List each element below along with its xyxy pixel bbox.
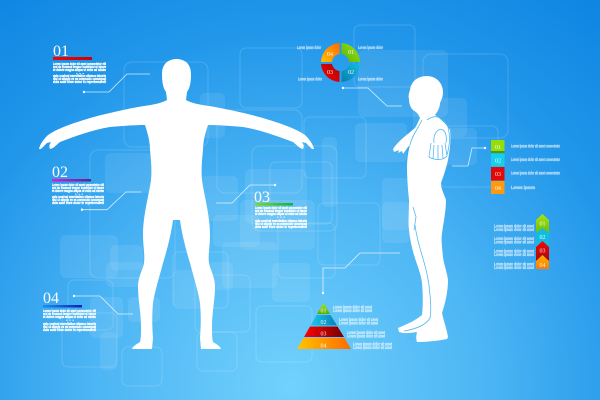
pyramid chart — [297, 303, 392, 350]
callout 04 — [43, 290, 133, 332]
item 04: 04 — [495, 186, 501, 192]
connector 03 — [216, 184, 276, 203]
number 02: 02 — [52, 164, 68, 181]
callout 01 — [53, 43, 150, 93]
bar 04 — [43, 305, 82, 308]
text block 04: duis aute irure dolor in reprehenderit — [43, 328, 97, 332]
text block 02: sed do eiusmod tempor incididunt ut labore — [52, 186, 104, 190]
pyramid chart: Lorem ipsum dolor sit amet — [333, 308, 372, 313]
item 01: 01 — [495, 145, 501, 151]
arrow 03: 03 — [540, 248, 546, 254]
text block 04 — [43, 309, 97, 332]
tier 03: 03 — [320, 332, 326, 338]
arrow stack: Lorem ipsum dolor sit amet — [494, 240, 534, 244]
text block 03: et dolore magna aliqua ut enim ad minim — [255, 212, 307, 216]
text block 02: . . . — [75, 192, 83, 196]
tier 02: 02 — [320, 320, 326, 326]
connector 04 — [73, 295, 133, 314]
donut labels: Lorem ipsum dolor — [358, 76, 383, 82]
text block 04: quis nostrud exercitation ullamco laboris — [43, 322, 96, 326]
text block 01: nisi ut aliquip ex ea commodo consequat — [53, 77, 107, 81]
donut chart: 01 — [348, 50, 354, 56]
text block 02: quis nostrud exercitation ullamco laboris — [52, 195, 104, 199]
arrow stack: Lorem ipsum dolor sit amet — [494, 252, 534, 257]
text block 04: et dolore magna aliqua ut enim ad minim — [43, 315, 96, 319]
callout 03 — [216, 184, 308, 229]
tier 01: 01 — [320, 308, 326, 314]
text block 02: duis aute irure dolor in reprehenderit — [52, 201, 105, 205]
text block 03 — [255, 206, 308, 229]
arrow 04: 04 — [540, 263, 546, 269]
text block 02: Lorem ipsum dolor sit amet consectetur elit — [52, 183, 105, 187]
numbered list: Lorem ipsum dolor sit amet consectetur — [511, 157, 560, 162]
connector: pyramid — [322, 253, 400, 294]
segment 02 — [342, 64, 360, 82]
connector: donut — [342, 87, 402, 106]
text block 03: nisi ut aliquip ex ea commodo consequat — [255, 222, 308, 226]
segment 03 — [321, 64, 340, 82]
pyramid chart: Lorem ipsum dolor sit amet — [339, 317, 378, 322]
pyramid chart: Lorem ipsum dolor sit amet — [333, 304, 372, 310]
pyramid chart: Lorem ipsum dolor sit amet — [339, 320, 378, 326]
segment 01 — [342, 43, 360, 62]
text block 01 — [53, 62, 107, 84]
donut labels: Lorem ipsum dolor — [297, 45, 321, 50]
pyramid chart: Lorem ipsum dolor sit amet — [347, 334, 385, 338]
text block 01: quis nostrud exercitation ullamco laboris — [53, 74, 106, 78]
callout 02 — [52, 164, 141, 211]
bar 03 — [255, 203, 293, 206]
donut chart: 03 — [327, 70, 333, 76]
figure: side view silhouette — [393, 76, 450, 342]
numbered list: Lorem ipsum — [511, 185, 535, 190]
donut labels: Lorem ipsum dolor — [358, 45, 383, 50]
text block 01: duis aute irure dolor in reprehenderit — [53, 80, 107, 84]
text block 03: duis aute irure dolor in reprehenderit — [255, 225, 308, 229]
pyramid chart: Lorem ipsum dolor sit amet — [353, 342, 392, 346]
donut chart — [321, 43, 360, 82]
arrow stack: Lorem ipsum dolor sit amet — [494, 265, 534, 270]
arrow stack — [494, 214, 549, 270]
donut chart: 02 — [348, 70, 354, 76]
text block 01: Lorem ipsum dolor sit amet consectetur elit — [53, 62, 107, 66]
item 03: 03 — [495, 172, 501, 178]
bar 02 — [52, 179, 91, 182]
text block 01: et dolore magna aliqua ut enim ad minim — [53, 68, 106, 72]
text block 02 — [52, 183, 105, 205]
connector: side figure — [452, 147, 486, 166]
text block 01: sed do eiusmod tempor incididunt ut labore — [53, 65, 106, 69]
text block 03: sed do eiusmod tempor incididunt ut labore — [255, 209, 307, 213]
text block 04: Lorem ipsum dolor sit amet consectetur elit — [43, 309, 97, 313]
arrow stack: Lorem ipsum dolor sit amet — [494, 248, 534, 254]
text block 04: sed do eiusmod tempor incididunt ut labore — [43, 312, 96, 316]
arrow stack: Lorem ipsum dolor sit amet — [494, 224, 534, 228]
text block 03: Lorem ipsum dolor sit amet consectetur elit — [255, 206, 308, 210]
figure: front view silhouette — [39, 59, 314, 349]
text block 02: nisi ut aliquip ex ea commodo consequat — [52, 198, 105, 202]
segment 04 — [321, 43, 340, 62]
item 02: 02 — [495, 158, 501, 164]
number 03: 03 — [254, 189, 270, 206]
numbered list — [491, 140, 560, 194]
connector 02 — [81, 192, 141, 211]
numbered list: Lorem ipsum dolor sit amet consectetur — [511, 170, 560, 176]
text block 04: nisi ut aliquip ex ea commodo consequat — [43, 325, 97, 329]
text block 03: . . . — [277, 214, 285, 218]
text block 02: et dolore magna aliqua ut enim ad minim — [52, 189, 104, 193]
pyramid chart: Lorem ipsum dolor sit amet — [353, 345, 392, 350]
arrow stack: Lorem ipsum dolor sit amet — [494, 236, 534, 241]
text block 03: quis nostrud exercitation ullamco laboris — [255, 219, 307, 223]
number 01: 01 — [53, 43, 69, 60]
number 04: 04 — [43, 290, 59, 307]
bar 01 — [53, 57, 92, 60]
arrow 01: 01 — [540, 222, 546, 228]
tier 04: 04 — [320, 344, 326, 350]
arrow 02: 02 — [540, 235, 546, 241]
numbered list: Lorem ipsum dolor sit amet consectetur — [511, 144, 560, 148]
donut labels: Lorem ipsum dolor — [298, 76, 322, 82]
donut chart: 04 — [327, 52, 333, 58]
connector 01 — [83, 74, 150, 93]
arrow stack: Lorem ipsum dolor sit amet — [494, 262, 534, 266]
donut labels — [297, 45, 383, 82]
arrow stack: Lorem ipsum dolor sit amet — [494, 227, 534, 232]
pyramid chart: Lorem ipsum dolor sit amet — [347, 330, 385, 335]
text block 04: . . . — [66, 318, 74, 322]
background panels — [60, 25, 508, 386]
text block 01: . . . — [76, 71, 84, 75]
